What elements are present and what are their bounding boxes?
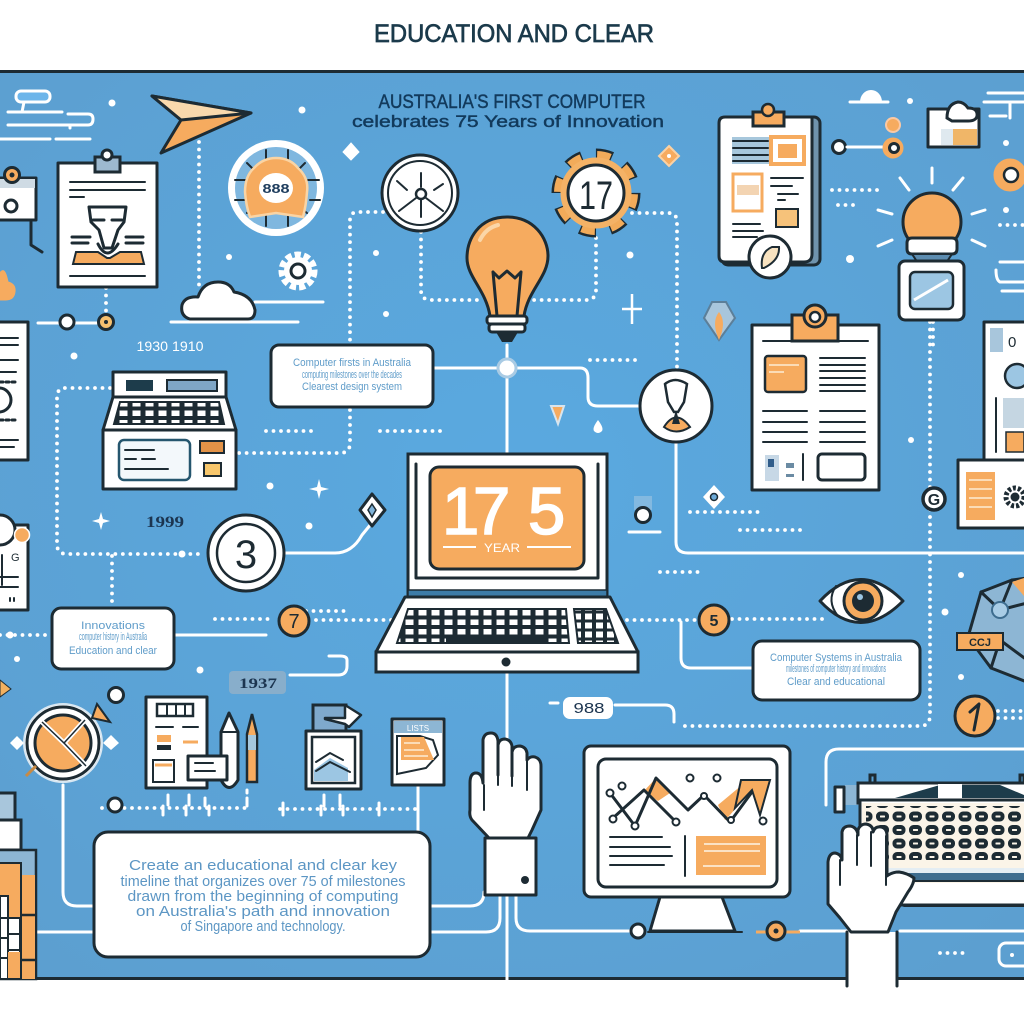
title: EDUCATION AND CLEAR bbox=[374, 20, 654, 48]
eye bbox=[820, 580, 903, 622]
compass dial bbox=[382, 155, 458, 231]
gear badge 17 bbox=[559, 156, 633, 230]
left figure card: G bbox=[11, 552, 20, 564]
step 7 badge bbox=[279, 606, 309, 636]
notes document bbox=[392, 719, 444, 785]
node rings bbox=[108, 688, 124, 812]
badge: gear 888: 888 bbox=[262, 182, 290, 196]
text box: left bbox=[52, 608, 174, 669]
letter badge G: G bbox=[928, 492, 940, 509]
clipboard: report bbox=[719, 104, 820, 278]
clipboard: article bbox=[752, 305, 879, 490]
text box: right: Clear and educational bbox=[787, 676, 885, 688]
right device panel bbox=[984, 322, 1024, 462]
laptop bbox=[376, 454, 638, 672]
text box: top: computing milestones over the decades bbox=[302, 369, 402, 381]
left building stack bbox=[0, 793, 36, 979]
text box: left: Innovations bbox=[81, 620, 146, 632]
step 1 badge bbox=[955, 696, 995, 736]
step 7 badge: 7 bbox=[288, 611, 300, 633]
small gear bbox=[282, 255, 314, 287]
orange flower bbox=[994, 159, 1024, 191]
top-right lines bbox=[984, 93, 1024, 118]
hand and cuff bbox=[470, 733, 541, 895]
gemstone: CCJ bbox=[969, 637, 991, 649]
subtitle bbox=[352, 92, 664, 131]
year pill 1937 bbox=[229, 671, 286, 694]
small shield icon bbox=[704, 302, 735, 340]
right small card bbox=[958, 460, 1024, 528]
node pair bbox=[60, 314, 114, 330]
right device panel: 0 bbox=[1008, 334, 1016, 351]
cloud bbox=[182, 282, 255, 319]
diamond marker bbox=[360, 494, 385, 526]
laptop: YEAR bbox=[484, 541, 520, 555]
text box: right bbox=[753, 641, 920, 700]
right-edge lines bbox=[996, 262, 1024, 291]
sparkles bbox=[92, 479, 329, 530]
hand on keyboard bbox=[828, 824, 914, 992]
text block bbox=[120, 858, 406, 935]
left document bbox=[0, 322, 28, 460]
vintage computer bbox=[103, 372, 236, 489]
text block: on Australia's path and innovation bbox=[136, 904, 390, 920]
text box: right: milestones of computer history and innovations bbox=[786, 663, 886, 675]
step S badge: 5 bbox=[710, 613, 719, 630]
subtitle: AUSTRALIA'S FIRST COMPUTER bbox=[378, 92, 646, 113]
text box: top bbox=[271, 345, 433, 407]
storage box icon bbox=[928, 102, 979, 147]
step 3 badge bbox=[208, 515, 284, 591]
sparkle bbox=[622, 294, 642, 324]
connector ticks bbox=[163, 790, 418, 815]
text block: drawn from the beginning of computing bbox=[128, 889, 398, 905]
gemstone bbox=[957, 578, 1024, 682]
date label: 1930 1910 bbox=[136, 338, 204, 354]
form and pencils bbox=[146, 697, 257, 788]
text box: top: Clearest design system bbox=[302, 381, 402, 393]
orange pin bbox=[551, 406, 564, 424]
lightbulb bbox=[467, 217, 548, 342]
text box: top: Computer firsts in Australia bbox=[293, 357, 412, 369]
left figure card bbox=[0, 515, 30, 610]
top-left speech bubbles bbox=[0, 91, 93, 139]
left arrow fragment bbox=[0, 680, 11, 697]
text block: Create an educational and clear key bbox=[129, 858, 398, 874]
decorative dots bbox=[6, 100, 1009, 680]
text box: left: computer history in Australia bbox=[79, 631, 147, 643]
glowing bulb bbox=[878, 168, 985, 320]
drop bbox=[594, 420, 602, 433]
diamond marker bbox=[703, 485, 725, 509]
year pill 1937: 1937 bbox=[239, 676, 278, 692]
bottom-right pill bbox=[999, 943, 1024, 966]
badge: gear 888 bbox=[228, 140, 324, 236]
orange diamond bbox=[659, 146, 679, 166]
large text box bbox=[94, 832, 430, 957]
connector with orange node bbox=[832, 118, 903, 158]
small ring marker bbox=[629, 496, 660, 532]
letter badge G bbox=[923, 488, 945, 510]
typewriter bbox=[835, 775, 1024, 906]
text box: left: Education and clear bbox=[69, 645, 157, 657]
hourglass badge bbox=[640, 370, 712, 442]
step S badge bbox=[699, 605, 729, 635]
text box: right: Computer Systems in Australia bbox=[770, 652, 903, 664]
notes document: LISTS bbox=[407, 724, 429, 733]
gear badge 17: 17 bbox=[579, 174, 613, 218]
image frame with arrow bbox=[306, 705, 361, 789]
dome icon bbox=[860, 90, 913, 104]
year pill 988 bbox=[550, 697, 613, 719]
year 1999: 1999 bbox=[146, 514, 184, 531]
subtitle: celebrates 75 Years of Innovation bbox=[352, 112, 664, 131]
left orange cloud bbox=[0, 271, 15, 300]
central node bbox=[498, 359, 516, 377]
diamond bbox=[343, 143, 359, 160]
step 3 badge: 3 bbox=[235, 533, 257, 577]
laptop: 175 bbox=[442, 474, 565, 549]
clipboard: portrait bbox=[58, 150, 157, 287]
text block: of Singapore and technology. bbox=[180, 919, 346, 935]
monitor base nodes bbox=[631, 922, 800, 940]
text block: timeline that organizes over 75 of milestones bbox=[120, 874, 406, 890]
year pill 988: 988 bbox=[574, 700, 604, 717]
left card icon bbox=[0, 168, 42, 252]
monitor with chart bbox=[584, 746, 790, 932]
pie chart badge bbox=[10, 704, 119, 782]
paper plane bbox=[152, 96, 251, 153]
